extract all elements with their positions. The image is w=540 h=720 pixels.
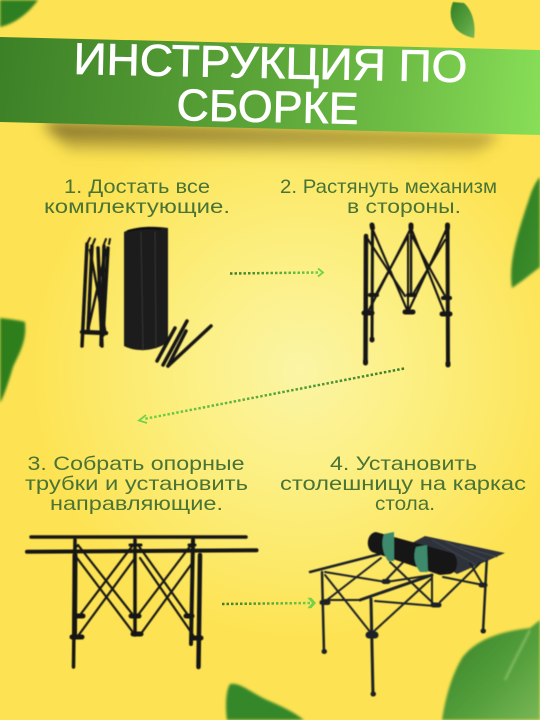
leaf: left middle [0, 318, 25, 403]
leaf: top right [451, 2, 475, 38]
step 3 text: 3. Собрать опорные [28, 453, 245, 475]
step 4 text [280, 453, 526, 515]
illustration: assembled table with rolled tabletop [310, 532, 505, 695]
arrow: step 3 to step 4 [222, 598, 315, 608]
leaf: bottom centre [226, 684, 304, 720]
arrow: step 2 to step 3 [139, 368, 404, 423]
leaf: bottom right [442, 620, 540, 720]
step 4 text: столешницу на каркас [280, 473, 526, 495]
title banner [0, 37, 540, 135]
folded frame [82, 238, 110, 346]
step 1 text: комплектующие. [44, 196, 230, 218]
arrow: step 1 to step 2 [230, 268, 323, 276]
step 2 text: в стороны. [347, 196, 461, 218]
step 1 text: 1. Достать все [64, 176, 210, 198]
step 3 text [25, 453, 248, 515]
leaf: right middle [511, 177, 540, 288]
step 1 text [44, 176, 230, 218]
illustration: folded frame, rolled tabletop and tubes [82, 227, 211, 366]
banner shadow [42, 122, 500, 160]
straps [382, 532, 428, 572]
title [72, 35, 468, 136]
leaf: top left [0, 0, 38, 27]
title: ИНСТРУКЦИЯ ПО [73, 35, 468, 92]
step 4 text: стола. [375, 493, 435, 515]
support tubes [157, 321, 211, 366]
step 4 text: 4. Установить [330, 453, 477, 475]
title: СБОРКЕ [176, 81, 359, 134]
step 2 text [280, 176, 497, 218]
step 3 text: трубки и установить [25, 473, 248, 495]
illustration: frame with guide rails [27, 537, 256, 667]
rolled tabletop [368, 532, 457, 575]
tabletop [410, 536, 505, 574]
illustration: expanded frame [364, 225, 450, 365]
table frame [310, 554, 487, 695]
rolled tabletop [124, 227, 168, 350]
step 3 text: направляющие. [50, 493, 223, 515]
step 2 text: 2. Растянуть механизм [280, 176, 497, 198]
